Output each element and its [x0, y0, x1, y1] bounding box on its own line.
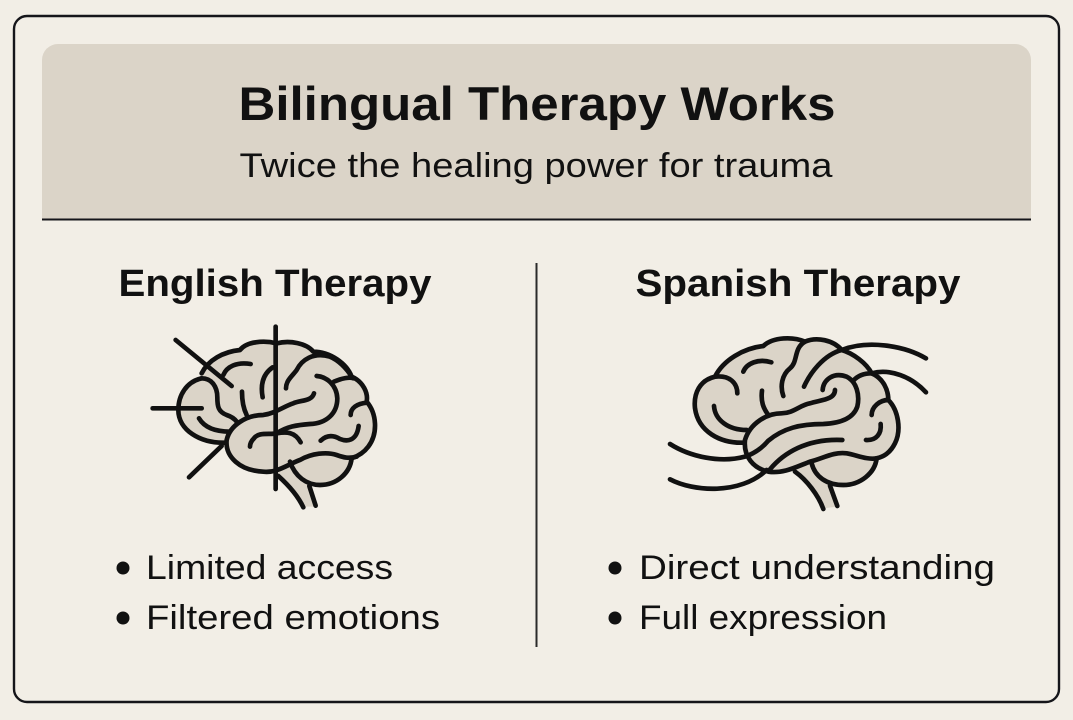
bullet list: Full expression — [639, 599, 887, 637]
title: Bilingual Therapy Works — [238, 77, 836, 130]
bullet list — [116, 549, 440, 637]
header band — [42, 44, 1031, 220]
bullet list — [608, 549, 995, 637]
bullet list: Filtered emotions — [146, 599, 440, 637]
panel: Spanish therapy — [608, 263, 995, 637]
panel: English therapy — [116, 263, 440, 637]
heading: Spanish Therapy: Spanish Therapy — [636, 263, 960, 305]
heading: English Therapy: English Therapy — [118, 263, 432, 305]
icon: brain with cut lines — [153, 327, 375, 507]
bullet list: Limited access — [146, 549, 393, 587]
subtitle: Twice the healing power for trauma — [240, 147, 833, 185]
center divider — [536, 263, 538, 647]
icon: brain with flowing lines — [670, 338, 926, 509]
bullet list: Direct understanding — [639, 549, 995, 587]
